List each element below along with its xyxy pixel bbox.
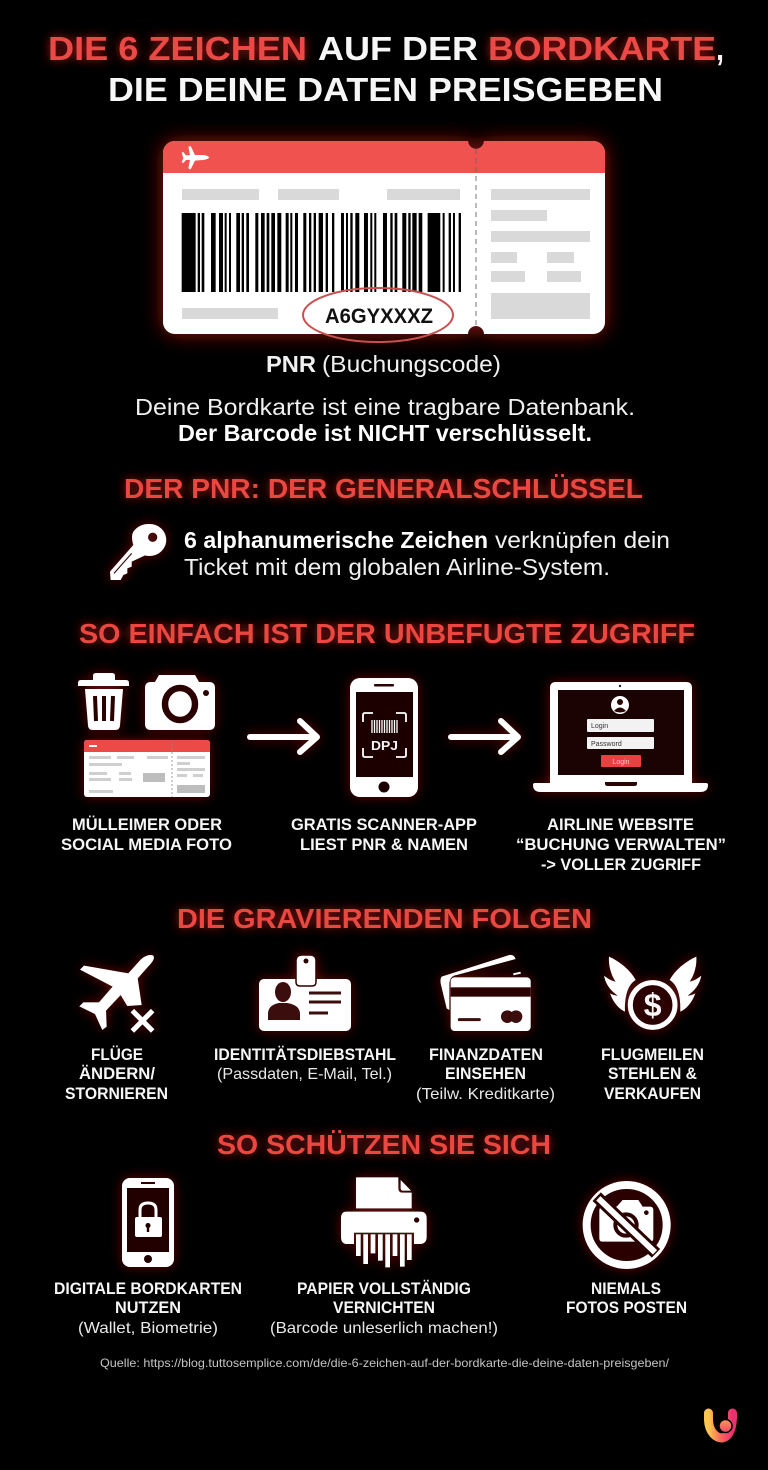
label step 3: -> VOLLER ZUGRIFF bbox=[541, 855, 701, 874]
ticket caption: (Buchungscode) bbox=[322, 351, 501, 377]
icon: no photos bbox=[587, 1185, 667, 1265]
password field bbox=[587, 737, 654, 749]
label: no photos bbox=[566, 1279, 687, 1317]
label: flights: STORNIEREN bbox=[65, 1084, 168, 1103]
title: BORDKARTE bbox=[488, 30, 716, 67]
source: Quelle: https://blog.tuttosemplice.com/de/die-6-zeichen-auf-der-bordkarte-die-deine-daten-preisgeben/ bbox=[100, 1356, 670, 1370]
label: paper: PAPIER VOLLSTÄNDIG bbox=[297, 1279, 471, 1298]
barcode bbox=[182, 213, 461, 292]
icon: trash can bbox=[78, 673, 129, 730]
boarding pass illustration bbox=[163, 141, 605, 342]
heading: protection: SO SCHÜTZEN SIE SICH bbox=[217, 1129, 551, 1160]
step 3: laptop login bbox=[533, 682, 708, 792]
step labels bbox=[61, 815, 726, 874]
title: DIE 6 ZEICHEN bbox=[48, 30, 307, 67]
highlighted PNR code bbox=[303, 288, 453, 342]
label step 2 bbox=[291, 815, 477, 854]
label: miles: VERKAUFEN bbox=[604, 1084, 701, 1103]
icon: key bbox=[110, 524, 166, 580]
label: digital: DIGITALE BORDKARTEN bbox=[54, 1279, 242, 1298]
heading: consequences: DIE GRAVIERENDEN FOLGEN bbox=[177, 903, 592, 934]
PNR description bbox=[184, 527, 670, 580]
label: finance: EINSEHEN bbox=[445, 1064, 526, 1083]
label: flights: FLÜGE bbox=[91, 1045, 143, 1064]
logo bbox=[708, 1413, 733, 1438]
label: identity bbox=[214, 1045, 396, 1083]
label: miles: STEHLEN & bbox=[608, 1064, 697, 1083]
login button bbox=[601, 755, 641, 767]
label: digital bbox=[54, 1279, 242, 1337]
scan frame bbox=[363, 713, 406, 757]
label step 3 bbox=[516, 815, 726, 874]
ticket body bbox=[163, 141, 605, 334]
label: miles bbox=[601, 1045, 704, 1103]
scanned code: DPJ bbox=[371, 738, 398, 753]
intro text: Deine Bordkarte ist eine tragbare Datenbank. bbox=[135, 394, 635, 420]
ticket red header bbox=[163, 141, 605, 173]
title bbox=[48, 30, 724, 108]
title: DIE DEINE DATEN PREISGEBEN bbox=[108, 71, 663, 108]
heading: access: SO EINFACH IST DER UNBEFUGTE ZUGRIFF bbox=[79, 618, 695, 649]
label: identity: IDENTITÄTSDIEBSTAHL bbox=[214, 1045, 396, 1064]
perforation bbox=[475, 149, 477, 326]
PNR description: Ticket mit dem globalen Airline-System. bbox=[184, 554, 610, 580]
intro text: Der Barcode ist NICHT verschlüsselt. bbox=[178, 420, 592, 446]
label: finance: FINANZDATEN bbox=[429, 1045, 543, 1064]
login field bbox=[587, 719, 654, 732]
blurred data fields bbox=[182, 189, 590, 319]
PNR description: 6 alphanumerische Zeichen bbox=[184, 527, 488, 553]
password field: Password bbox=[591, 741, 622, 748]
label: flights bbox=[65, 1045, 168, 1103]
label step 2: LIEST PNR & NAMEN bbox=[300, 835, 468, 854]
small boarding pass bbox=[84, 740, 210, 797]
label: identity: (Passdaten, E-Mail, Tel.) bbox=[217, 1066, 392, 1083]
consequence labels bbox=[65, 1045, 704, 1103]
login field: Login bbox=[591, 723, 608, 730]
PNR description: verknüpfen dein bbox=[495, 527, 670, 553]
heading: PNR: DER PNR: DER GENERALSCHLÜSSEL bbox=[124, 473, 643, 504]
label: digital: (Wallet, Biometrie) bbox=[78, 1320, 218, 1337]
label: flights: ÄNDERN/ bbox=[79, 1064, 155, 1083]
step 1: trash and photo bbox=[78, 673, 215, 797]
intro text bbox=[135, 394, 635, 446]
icon: winged coin bbox=[604, 957, 701, 1027]
icon: phone with lock bbox=[122, 1178, 174, 1267]
icon: plane bbox=[182, 146, 209, 169]
user avatar bbox=[611, 696, 629, 714]
label step 2: GRATIS SCANNER-APP bbox=[291, 815, 477, 834]
label: paper: (Barcode unleserlich machen!) bbox=[270, 1320, 498, 1337]
icon: plane with x bbox=[79, 955, 154, 1031]
label step 1: SOCIAL MEDIA FOTO bbox=[61, 835, 232, 854]
login button: Login bbox=[612, 759, 630, 766]
label: digital: NUTZEN bbox=[115, 1298, 181, 1317]
title: AUF DER bbox=[318, 30, 478, 67]
dollar sign: $ bbox=[644, 987, 662, 1023]
label step 3: AIRLINE WEBSITE bbox=[547, 815, 694, 834]
icon: camera bbox=[145, 675, 215, 730]
label: paper bbox=[270, 1279, 498, 1337]
label: finance: (Teilw. Kreditkarte) bbox=[416, 1086, 555, 1103]
barcode bbox=[372, 720, 397, 733]
label: miles: FLUGMEILEN bbox=[601, 1045, 704, 1064]
ticket caption: PNR bbox=[266, 351, 316, 377]
icon: credit cards bbox=[440, 955, 531, 1031]
highlighted PNR code: A6GYXXXZ bbox=[325, 304, 433, 328]
arrow bbox=[451, 721, 518, 752]
label: paper: VERNICHTEN bbox=[333, 1298, 435, 1317]
label: no photos: FOTOS POSTEN bbox=[566, 1298, 687, 1317]
label: finance bbox=[416, 1045, 555, 1103]
label step 3: “BUCHUNG VERWALTEN” bbox=[516, 835, 726, 854]
label: no photos: NIEMALS bbox=[591, 1279, 661, 1298]
title: , bbox=[716, 30, 724, 67]
label step 1: MÜLLEIMER ODER bbox=[72, 815, 222, 834]
icon: shredder bbox=[341, 1177, 427, 1267]
step 2: phone scanner bbox=[350, 678, 418, 797]
protection labels bbox=[54, 1279, 687, 1337]
label step 1 bbox=[61, 815, 232, 854]
icon: ID card bbox=[259, 955, 351, 1031]
arrow bbox=[250, 721, 317, 752]
